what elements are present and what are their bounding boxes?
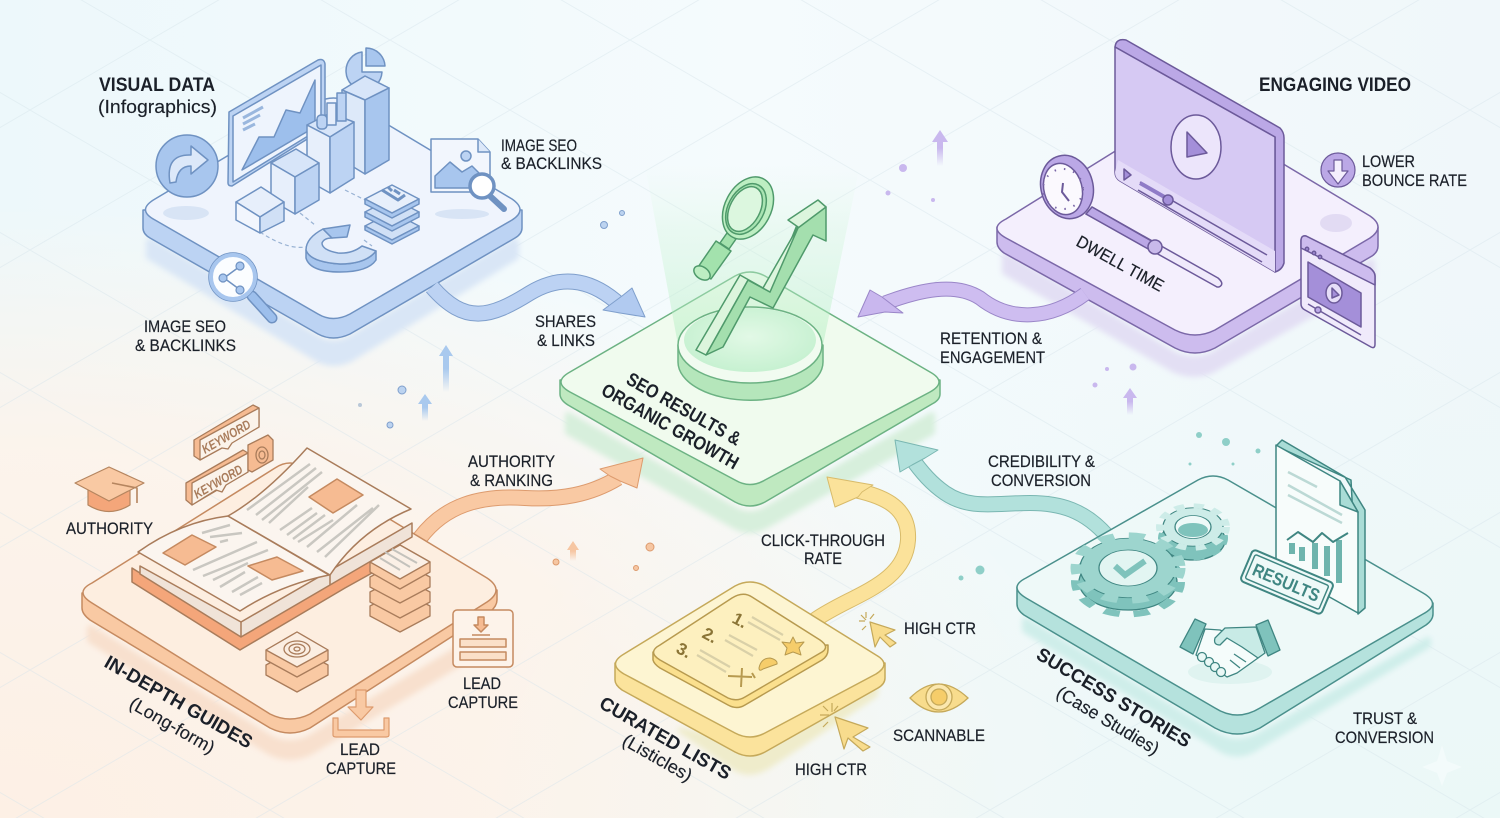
panel: curated lists platform <box>596 582 885 786</box>
sparkle <box>1422 745 1462 786</box>
arrow: shares and links <box>432 282 645 317</box>
icon: clock <box>1034 149 1100 225</box>
text: click-through rate: CLICK-THROUGH <box>761 531 885 550</box>
text: image seo and backlinks left: IMAGE SEO <box>144 317 226 336</box>
icon: dwell-time slider <box>1086 207 1222 287</box>
text: authority and ranking: AUTHORITY <box>468 452 555 471</box>
text: authority and ranking <box>468 452 555 490</box>
icon: results stamp: RESULTS <box>1250 560 1323 606</box>
icon: play button <box>1171 115 1221 179</box>
icon: keyword tags <box>186 405 273 505</box>
icon: magnifier <box>691 168 784 283</box>
text: shares and links <box>535 312 596 350</box>
panel: list card <box>653 594 828 708</box>
text: image seo and backlinks right: & BACKLINKS <box>501 154 602 173</box>
text: lower bounce rate: LOWER <box>1362 152 1415 171</box>
text: retention and engagement: ENGAGEMENT <box>940 348 1045 367</box>
icon: keyword stack <box>370 545 430 632</box>
text: authority and ranking: & RANKING <box>470 471 553 490</box>
text: credibility and conversion: CREDIBILITY & <box>988 452 1096 471</box>
text: image seo and backlinks right: IMAGE SEO <box>501 136 577 155</box>
text: trust and conversion: CONVERSION <box>1335 728 1434 747</box>
small up arrows <box>418 130 1137 561</box>
text: authority: AUTHORITY <box>66 519 153 538</box>
icon: keyword tags: KEYWORD <box>191 461 246 502</box>
text: list numbers <box>673 609 751 662</box>
text: retention and engagement: RETENTION & <box>940 329 1043 348</box>
icon: gear small <box>1160 506 1226 560</box>
text: dwell time: DWELL TIME <box>1073 232 1167 296</box>
icon: small browser window <box>1301 236 1375 348</box>
icon: stacked layers <box>365 185 419 244</box>
icon: share arrow circle <box>156 135 218 197</box>
panel: success stories platform <box>1017 440 1433 759</box>
icon: medium column <box>307 113 354 193</box>
icon: gear large with check <box>1076 536 1180 614</box>
text: high ctr lower: HIGH CTR <box>795 760 867 779</box>
floating dots <box>358 164 1260 580</box>
text: trust and conversion <box>1335 709 1434 747</box>
light beam <box>645 165 860 383</box>
icon: results stamp <box>1240 549 1334 615</box>
text: list numbers: 3. <box>673 639 695 662</box>
text: panel title: IN-DEPTH GUIDES <box>101 652 256 753</box>
text: high ctr upper: HIGH CTR <box>904 619 976 638</box>
text: list numbers: 1. <box>729 609 751 632</box>
text lines on pages <box>193 464 379 595</box>
text: image seo and backlinks left <box>135 317 236 355</box>
icon: growth arrow <box>696 200 826 355</box>
icon: mini cylinders <box>317 93 346 129</box>
icon: lead capture form <box>453 610 513 667</box>
text: trust and conversion: TRUST & <box>1353 709 1418 728</box>
icon: tall column <box>342 76 389 174</box>
arrow: click-through rate <box>815 477 908 620</box>
icon: keyword tags: KEYWORD <box>199 416 254 457</box>
icon: monitor chart <box>228 60 325 186</box>
text: panel title: ORGANIC GROWTH <box>598 380 742 474</box>
text: panel title: (Long-form) <box>126 693 218 758</box>
text: click-through rate: RATE <box>804 549 842 568</box>
text: lead capture bottom: CAPTURE <box>326 759 396 778</box>
text: lead capture right: LEAD <box>463 674 501 693</box>
panel: central SEO results platform <box>560 165 940 530</box>
text: credibility and conversion <box>988 452 1096 490</box>
icon: magnifier on image <box>470 174 504 209</box>
icon: video player <box>1115 40 1284 272</box>
panel: in-depth guides platform <box>82 448 513 758</box>
icon: share magnifier <box>209 253 272 318</box>
text: lower bounce rate <box>1362 152 1467 190</box>
icon: cursor on platform <box>820 703 870 751</box>
icon: platform shadows <box>163 206 489 220</box>
text: image seo and backlinks right <box>501 136 602 173</box>
icon: cursor high CTR <box>859 612 896 647</box>
text: panel title: (Listicles) <box>619 730 696 786</box>
text: panel title: CURATED LISTS <box>596 693 734 785</box>
text: lower bounce rate: BOUNCE RATE <box>1362 171 1467 190</box>
text: lead capture right <box>448 674 518 712</box>
text: scannable: SCANNABLE <box>893 726 985 745</box>
icon: large box <box>271 149 319 214</box>
arrow: authority and ranking <box>420 458 643 538</box>
icon: podium <box>678 307 823 400</box>
text: panel title: (Case Studies) <box>1053 682 1163 759</box>
text: click-through rate <box>761 531 885 568</box>
text: visual data heading: VISUAL DATA <box>99 75 215 96</box>
text: panel title: SEO RESULTS & <box>623 369 744 450</box>
text: lead capture bottom: LEAD <box>340 740 380 759</box>
text: visual data heading <box>98 75 217 117</box>
text: list numbers: 2. <box>699 624 721 647</box>
icon: small box <box>236 187 284 233</box>
arrow: retention and engagement <box>858 289 1085 317</box>
text: panel title: SUCCESS STORIES <box>1032 644 1194 752</box>
arrow: credibility and conversion <box>895 440 1108 537</box>
text: lead capture bottom <box>326 740 396 778</box>
text: visual data heading: (Infographics) <box>98 97 217 117</box>
icon: report document <box>1276 440 1365 614</box>
icon: eye scannable <box>910 684 968 712</box>
text: lead capture right: CAPTURE <box>448 693 518 712</box>
icon: graduation cap <box>75 467 144 512</box>
text: engaging video heading: ENGAGING VIDEO <box>1259 75 1411 96</box>
text: retention and engagement <box>940 329 1045 367</box>
text: image seo and backlinks left: & BACKLINKS <box>135 336 236 355</box>
icon: lead capture tray arrow <box>333 690 389 737</box>
text: shares and links: & LINKS <box>537 331 595 350</box>
text: shares and links: SHARES <box>535 312 596 331</box>
dashed connector <box>260 190 372 247</box>
icon: handshake <box>1180 619 1280 684</box>
icon: pie chart <box>346 48 385 90</box>
icon: image file <box>431 139 490 192</box>
icon: target stack <box>266 632 328 692</box>
icon: lower bounce arrow <box>1321 153 1355 187</box>
icon: donut chart <box>306 225 376 272</box>
panel: visual data platform <box>143 48 522 362</box>
panel: engaging video platform <box>997 40 1378 374</box>
text: credibility and conversion: CONVERSION <box>991 471 1091 490</box>
icon: open book <box>132 448 412 650</box>
